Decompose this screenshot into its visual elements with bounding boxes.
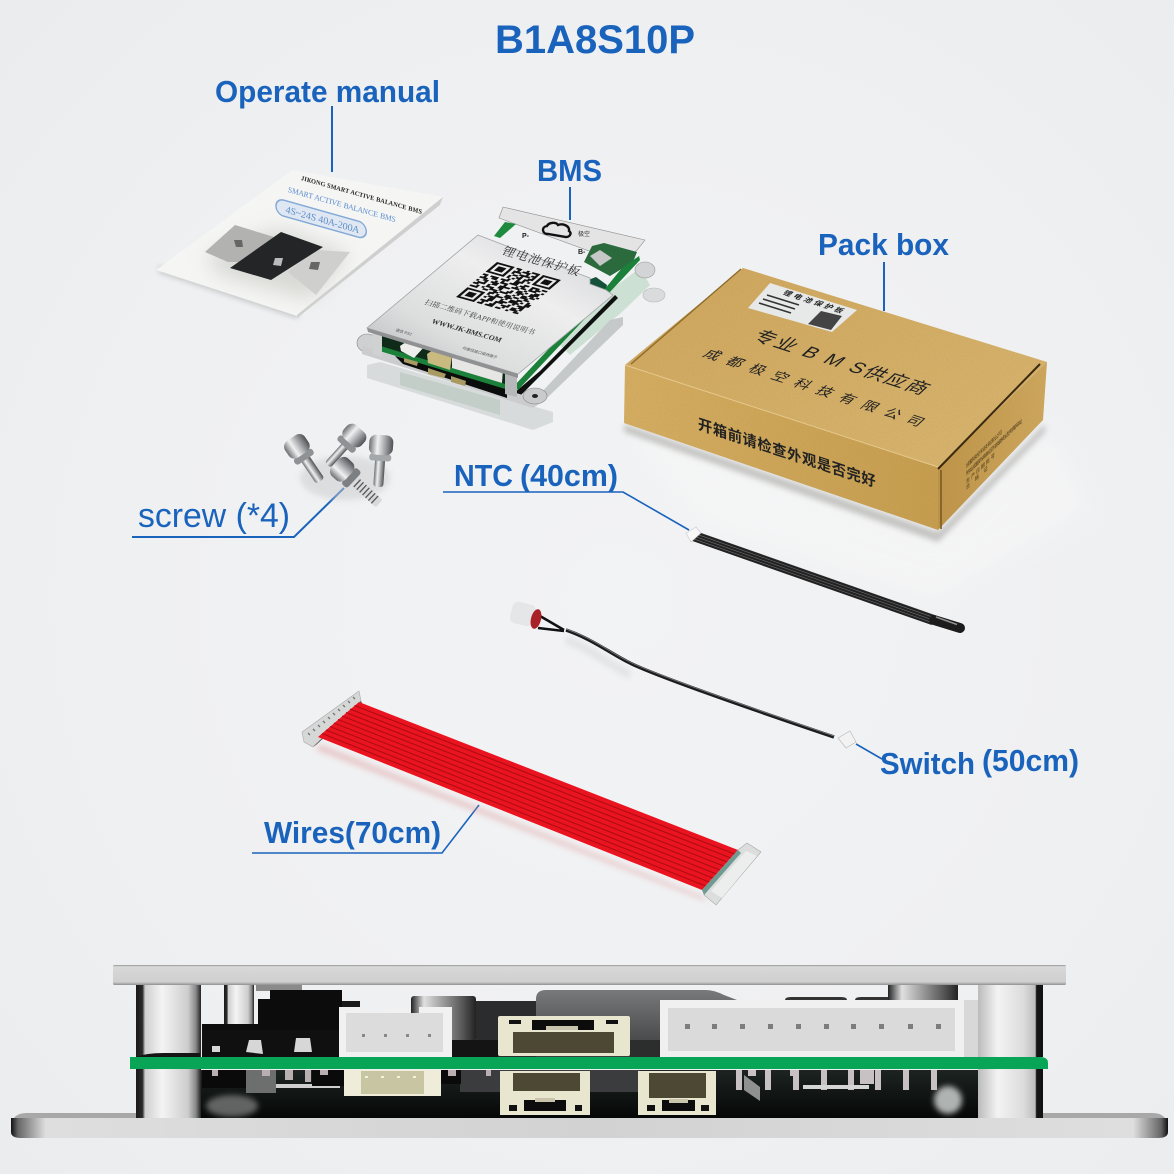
large ten-pin white connector <box>660 1000 964 1057</box>
solder pins left <box>212 1070 491 1082</box>
plate port labels: 通信 RS2 <box>394 328 413 336</box>
cloud logo: 极空 <box>578 230 590 238</box>
manual pill: 4S~24S 40A-200A <box>286 205 359 236</box>
under-board glare right <box>934 1086 962 1114</box>
switch connector <box>838 731 856 748</box>
reflected pcb <box>560 268 650 355</box>
black underside <box>514 295 618 396</box>
under-board cylinder <box>246 1070 276 1093</box>
left connector <box>302 691 362 747</box>
PCB top dark edge at standoff <box>136 1053 200 1057</box>
tan connector top <box>498 1016 630 1056</box>
switch split wires <box>538 616 564 631</box>
lower plate lip left <box>14 1113 136 1118</box>
box text: slogan: 专业 B M S供应商 <box>747 328 934 398</box>
NTC ribbon <box>690 532 935 624</box>
small SMDs right <box>630 1040 660 1057</box>
green PCB <box>130 1057 1048 1069</box>
lower plate lip right <box>1043 1113 1165 1118</box>
B- terminal label: B- <box>578 249 586 256</box>
leader line: operate manual <box>331 106 333 172</box>
panel: screws <box>132 421 394 537</box>
manual subtitle text: SMART ACTIVE BALANCE BMS <box>288 185 396 224</box>
box paper texture <box>626 273 1036 462</box>
box floor reflection <box>622 428 1088 598</box>
front connector white <box>400 338 425 358</box>
switch button red ring <box>529 608 543 630</box>
front connector long white <box>452 354 503 383</box>
panel: BMS product <box>357 153 665 430</box>
front dark cavity <box>372 330 512 388</box>
manual booklet <box>156 170 443 316</box>
manual photo: black device <box>230 232 323 280</box>
front-right standoff <box>505 372 517 397</box>
solder pins right <box>736 1070 937 1090</box>
right pcb detail plate <box>744 1075 760 1101</box>
NTC tip highlight <box>936 617 957 624</box>
panel: pack box <box>620 227 1088 598</box>
tab hole <box>532 394 538 398</box>
leader line: BMS <box>569 187 571 220</box>
switch cable wire <box>566 630 834 737</box>
lower tan connectors <box>404 358 418 366</box>
lower base plate strip <box>536 317 623 398</box>
ribbon shadow <box>316 744 708 902</box>
plate front thickness <box>367 328 518 378</box>
plate scan text: 扫描二维码下载APP和使用说明书 <box>423 297 538 337</box>
box top face <box>625 268 1047 467</box>
bottom plate front edge <box>362 346 548 408</box>
manual photo: left qr <box>234 240 243 247</box>
manual photo: right device <box>288 250 350 295</box>
front connector tan <box>427 350 452 370</box>
screw 3 <box>366 434 394 488</box>
small black SMDs centre <box>452 1040 498 1057</box>
cloud logo <box>543 223 590 238</box>
label: switch: (50cm) <box>982 743 1079 778</box>
right second tab <box>643 288 665 302</box>
panel: operate manual <box>156 74 443 318</box>
label: pack box: Pack box <box>818 227 950 262</box>
white four-pin connector <box>339 1007 452 1057</box>
under-board glare left <box>206 1095 258 1117</box>
under-board black parts <box>202 1070 461 1088</box>
reflected connectors <box>400 372 500 415</box>
black lower cavity <box>395 356 507 398</box>
switch cable highlight <box>566 629 834 736</box>
main aluminium plate <box>367 235 613 374</box>
box text: side small print: 地址成都市高新区科技路电话传真网址 <box>966 416 1023 478</box>
upper small cylinder <box>256 985 302 991</box>
silver strip under pins <box>803 1085 869 1089</box>
base plate right tab <box>635 262 655 278</box>
box fold: corner edge <box>940 470 942 529</box>
box text: front notice: 开箱前请检查外观是否完好 <box>698 415 876 491</box>
panel: red wires <box>252 691 761 905</box>
QR code <box>456 262 561 315</box>
panel: switch cable <box>509 600 1079 781</box>
under-board grey module <box>460 1070 640 1092</box>
top plate <box>113 965 1066 985</box>
upper rear plate <box>499 207 645 263</box>
box label sticker: 锂电池保护板 <box>781 289 847 315</box>
box fold: right lid <box>938 364 1040 469</box>
lower tan connector centre <box>428 368 446 378</box>
lower plate <box>11 1118 1168 1138</box>
box text: side small print: 合格证 <box>966 463 988 492</box>
plate URL: WWW.JK-BMS.COM <box>430 317 504 344</box>
label: NTC: NTC <box>454 458 513 493</box>
sticker qr <box>808 311 842 330</box>
label: switch: Switch <box>880 746 975 781</box>
label: operate manual: Operate manual <box>215 74 440 109</box>
grey module <box>536 990 737 1057</box>
box top edge highlight <box>625 365 938 467</box>
manual photo: center qr <box>273 258 283 266</box>
leader line: NTC <box>443 492 689 530</box>
screw 1 <box>281 431 330 488</box>
black block tab <box>342 1001 360 1007</box>
black block body <box>202 1030 342 1057</box>
panel: BMS side view <box>11 965 1168 1138</box>
left standoff upper <box>136 985 201 1057</box>
silver SMD tabs <box>212 1038 312 1054</box>
base plate left tab <box>357 334 377 352</box>
plate wire label: 均衡线接口接线端子 <box>461 346 499 360</box>
lower green block <box>583 277 607 294</box>
terminal silver insert <box>590 250 612 266</box>
cream connector under PCB <box>344 1070 441 1096</box>
tan connector lower right <box>638 1071 716 1115</box>
plate title: 锂电池保护板 <box>499 244 584 278</box>
red ribbon <box>318 702 738 890</box>
box label sticker <box>748 283 857 332</box>
box right face <box>938 362 1047 530</box>
manual pill <box>276 198 366 239</box>
label: screw: screw (*4) <box>138 497 290 535</box>
box contact shadow <box>624 424 1045 542</box>
box text: side small print: 生产日期批号 <box>966 450 995 486</box>
title: B1A8S10P <box>495 18 695 62</box>
upper small standoff <box>224 985 254 1026</box>
screw 4 <box>327 454 387 513</box>
under-board strip <box>276 1084 340 1088</box>
switch button body <box>509 600 537 628</box>
base plate front tab <box>523 388 547 404</box>
dark block centre <box>476 1001 536 1057</box>
right connector <box>702 843 761 905</box>
leader line: wires <box>252 805 479 853</box>
label: NTC: (40cm) <box>520 458 618 493</box>
sticker lines <box>759 295 799 313</box>
black block left <box>202 990 342 1057</box>
leader line: switch <box>856 744 882 759</box>
manual photo: right qr <box>309 262 320 270</box>
label: wires: Wires(70cm) <box>264 815 441 850</box>
NTC probe tip <box>934 620 960 628</box>
terminal labels: P- <box>522 233 530 240</box>
rear terminal: left green <box>494 222 516 238</box>
panel: NTC sensor <box>443 458 960 628</box>
box text: company: 成都极空科技有限公司 <box>699 347 928 429</box>
green board edge <box>374 344 512 391</box>
manual photo: left device <box>205 225 274 262</box>
rear terminal: right green block <box>584 243 637 276</box>
right standoff upper <box>978 985 1043 1057</box>
leader line: screw <box>132 488 344 537</box>
left standoff lower <box>136 1069 201 1118</box>
base plate reflection <box>367 362 553 430</box>
right side connector end <box>964 1000 980 1057</box>
screws soft shadow <box>300 456 390 500</box>
front-left standoff <box>372 330 382 357</box>
NTC connector <box>686 527 701 542</box>
box fold: left <box>631 269 741 364</box>
box text: side small print: 成都极空科技有限公司 <box>966 427 1002 470</box>
box front face <box>624 365 938 530</box>
under-board dark cavity <box>200 1070 980 1118</box>
label: BMS: BMS <box>537 153 602 188</box>
manual page edge <box>297 197 443 318</box>
capacitor <box>411 996 476 1042</box>
rear silver standoff right <box>888 985 958 1000</box>
pcb edge green <box>514 256 640 390</box>
manual lower fade <box>205 228 350 300</box>
rear cylinders right <box>785 997 917 1000</box>
screw 2 <box>319 421 369 473</box>
leader line: pack box <box>883 262 885 311</box>
switch cable shadow <box>566 640 630 675</box>
tan connector lower left <box>500 1071 590 1115</box>
manual heading text: JIKONG SMART ACTIVE BALANCE BMS <box>300 175 422 216</box>
right standoff lower <box>978 1069 1043 1118</box>
lower tan connector right <box>451 376 466 386</box>
manual shadow <box>158 266 300 318</box>
